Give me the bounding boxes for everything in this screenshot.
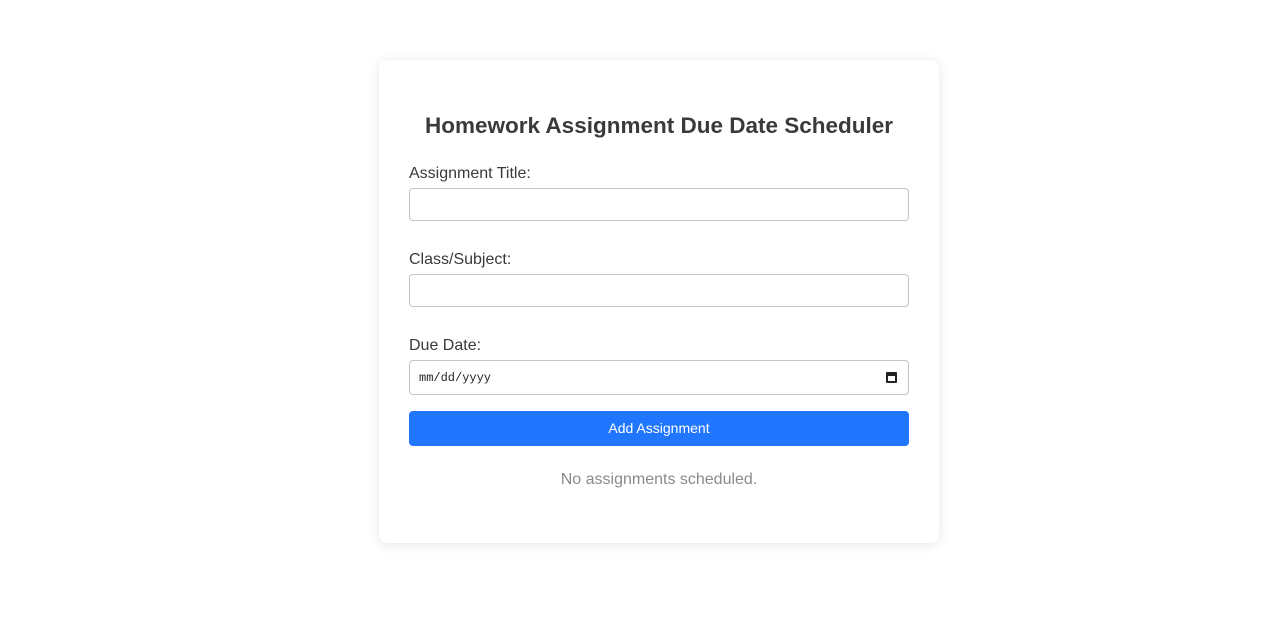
label: due date: Due Date: <box>409 337 481 354</box>
button: add assignment: Add Assignment <box>608 420 710 436</box>
panel: scheduler card <box>379 60 939 543</box>
input: assignment title <box>409 188 909 221</box>
input: due date <box>409 360 909 395</box>
button: add assignment <box>409 411 909 446</box>
icon: calendar <box>886 372 897 383</box>
title: Homework Assignment Due Date Scheduler <box>425 113 893 138</box>
text: empty state: No assignments scheduled. <box>561 471 757 488</box>
input: due date: mm/dd/yyyy <box>419 371 491 385</box>
label: class subject: Class/Subject: <box>409 251 511 268</box>
input: class subject <box>409 274 909 307</box>
label: assignment title: Assignment Title: <box>409 165 531 182</box>
